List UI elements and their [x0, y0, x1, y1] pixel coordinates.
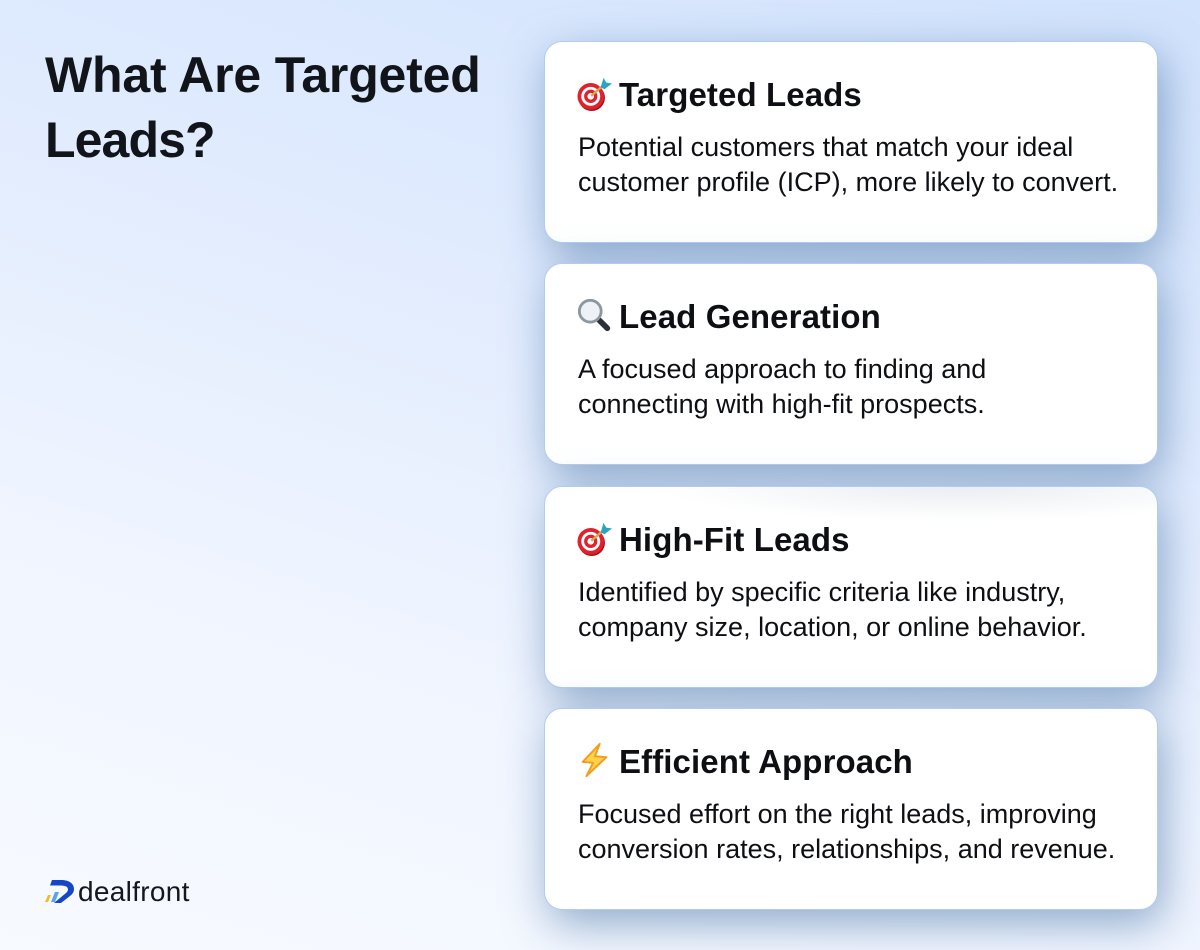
text block	[578, 132, 1118, 196]
icon: magnifying glass	[578, 298, 610, 332]
icon: dart target	[578, 523, 612, 556]
panel: high-fit leads	[544, 486, 1158, 688]
heading: Efficient Approach	[619, 743, 913, 780]
title: Leads?	[45, 112, 215, 168]
icon: lightning bolt	[582, 742, 608, 778]
text block: connecting with high-fit prospects.	[578, 388, 985, 418]
icon: logo mark	[45, 880, 74, 903]
text block	[578, 577, 1087, 642]
wordmark: dealfront	[78, 876, 190, 907]
text block: conversion rates, relationships, and revenue.	[578, 834, 1115, 864]
text block: Identified by specific criteria like industry,	[578, 577, 1065, 607]
panel: lead generation	[544, 263, 1158, 464]
text block: Focused effort on the right leads, improving	[578, 799, 1097, 829]
text block: Potential customers that match your ideal	[578, 132, 1073, 162]
heading: High-Fit Leads	[619, 521, 850, 558]
heading: Targeted Leads	[619, 76, 862, 113]
title: What Are Targeted	[45, 47, 481, 103]
title	[45, 47, 481, 168]
text block	[578, 799, 1115, 864]
icon: dart target	[578, 78, 612, 111]
text block: A focused approach to finding and	[578, 354, 986, 384]
text block: company size, location, or online behavior.	[578, 612, 1087, 642]
text block: customer profile (ICP), more likely to convert.	[578, 166, 1118, 196]
panel: efficient approach	[544, 708, 1158, 910]
logo: dealfront	[45, 876, 190, 907]
heading: Lead Generation	[619, 298, 881, 335]
text block	[578, 354, 986, 418]
panel: targeted leads	[544, 41, 1158, 242]
